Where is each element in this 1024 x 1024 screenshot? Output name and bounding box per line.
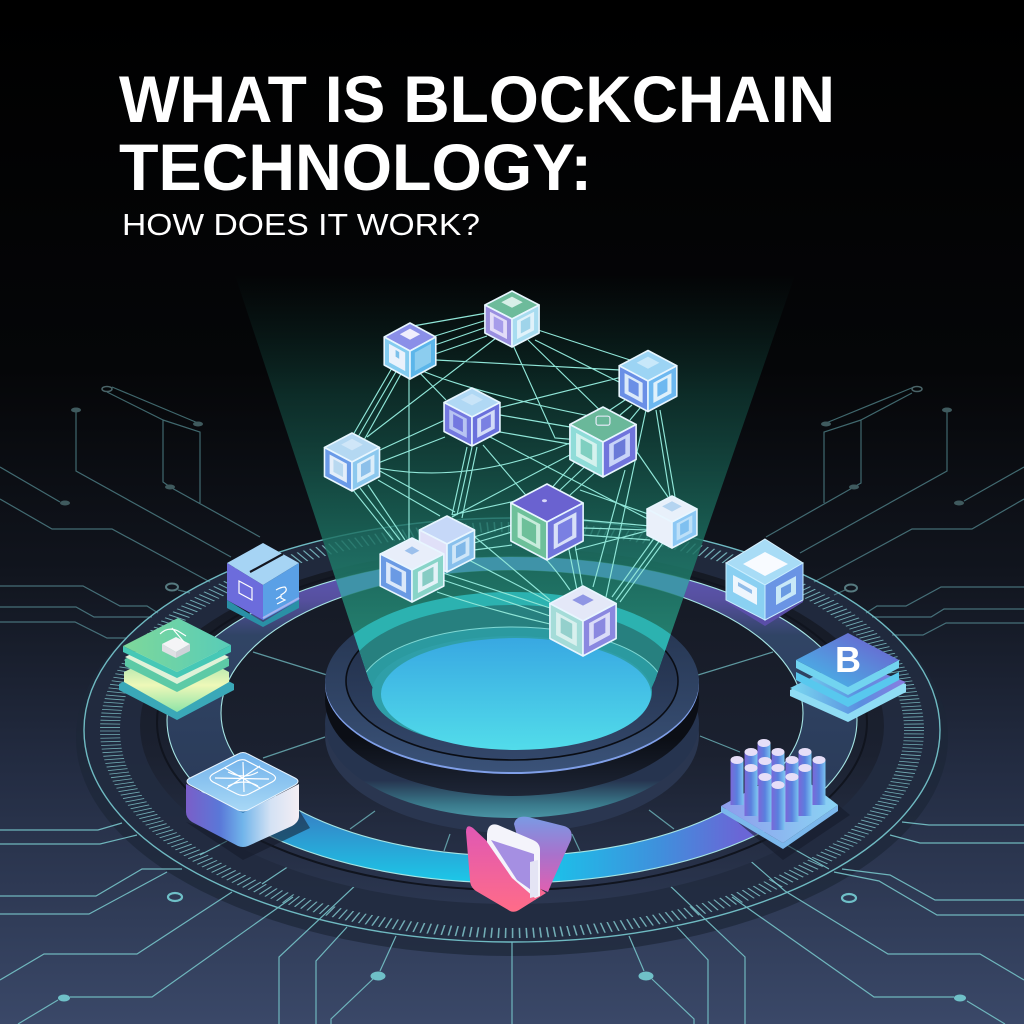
- light beam: [235, 275, 795, 725]
- main orbit band: [167, 557, 857, 883]
- subtitle: HOW DOES IT WORK?: [122, 207, 480, 242]
- title line 2: TECHNOLOGY:: [119, 130, 592, 204]
- shadow: chip tile: [186, 810, 310, 860]
- icon: B coin stack: [790, 633, 906, 722]
- platform rim inside the beam: [354, 592, 671, 688]
- icon: network chip tile: [186, 752, 299, 847]
- cube: far left: [324, 433, 380, 491]
- liquid pool: [372, 636, 652, 750]
- faint groove: [157, 554, 867, 890]
- inner disc around band: [140, 548, 884, 904]
- cube: front lower left: [380, 538, 444, 602]
- cube: upper right: [619, 350, 677, 412]
- inner disc: [84, 518, 940, 942]
- icon: green layered stack: [119, 618, 234, 720]
- cube: top: [485, 291, 539, 347]
- central platform: [325, 592, 699, 833]
- icon: top right cube: [726, 539, 803, 626]
- cube: bottom front: [550, 586, 616, 656]
- icon: pillar array: [721, 739, 838, 849]
- icon: folder: [466, 817, 572, 912]
- tick ring: [110, 527, 914, 933]
- circuit traces: [0, 387, 1024, 1024]
- cube: centre left: [444, 388, 500, 446]
- band seen through the beam: [336, 557, 690, 598]
- network connection lines: [353, 313, 675, 624]
- cube: upper left: [384, 323, 436, 379]
- circuit nodes: [58, 386, 966, 1002]
- shadow: pillar array: [735, 805, 850, 860]
- letter B: B: [835, 639, 861, 680]
- cube: rear lower left: [419, 516, 475, 572]
- spoke lines on the inner disc: [253, 652, 773, 851]
- title: [119, 62, 835, 242]
- cube: right small: [647, 496, 697, 548]
- title line 1: WHAT IS BLOCKCHAIN: [119, 62, 835, 136]
- cube: large purple: [511, 484, 583, 560]
- icon: package box: [227, 543, 299, 627]
- cube: green right: [570, 407, 636, 477]
- dark disc shadow beneath the outer ring: [76, 520, 948, 956]
- outer thin ring: [84, 518, 940, 942]
